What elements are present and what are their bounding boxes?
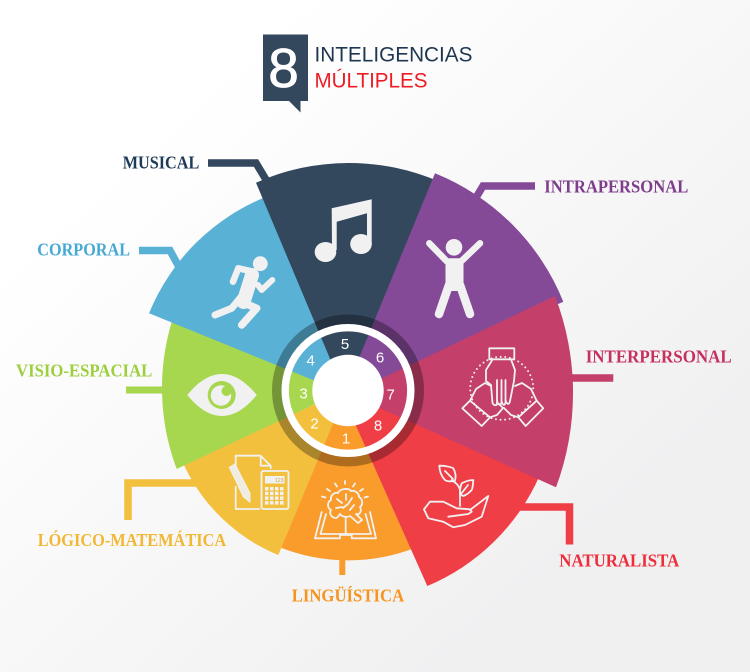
wedge bbox=[162, 321, 350, 469]
ring numbers: 7 bbox=[387, 386, 395, 404]
wedge bbox=[256, 163, 440, 392]
panel: interpersonal bbox=[345, 296, 732, 487]
wedge bbox=[341, 385, 539, 586]
title badge with number 8: 8 bbox=[268, 37, 299, 99]
panel: lingüística bbox=[279, 390, 412, 606]
connector bbox=[515, 507, 570, 544]
label: CORPORAL bbox=[37, 240, 130, 260]
panel: visio-espacial bbox=[16, 321, 350, 469]
connector bbox=[339, 555, 345, 575]
ring numbers: 8 bbox=[374, 418, 382, 434]
panel: corporal bbox=[37, 196, 355, 393]
wedge bbox=[149, 196, 355, 393]
ring numbers: 2 bbox=[310, 416, 319, 432]
panel: naturalista bbox=[341, 385, 680, 586]
icon: person jumping bbox=[429, 239, 480, 314]
connector bbox=[139, 250, 179, 267]
icon: document, pencil and calculator bbox=[229, 456, 288, 509]
icon: eye bbox=[187, 374, 257, 416]
label: INTERPERSONAL bbox=[586, 346, 732, 366]
white center disc bbox=[312, 355, 384, 426]
ring numbers: 1 bbox=[342, 430, 350, 448]
icon: brain over book bbox=[315, 481, 376, 538]
wedge bbox=[279, 390, 412, 560]
panel: musical bbox=[123, 152, 440, 392]
title bbox=[263, 34, 472, 112]
wedge bbox=[345, 296, 573, 487]
center ring bbox=[277, 320, 419, 462]
label: VISIO-ESPACIAL bbox=[16, 361, 152, 381]
white ring bbox=[285, 328, 411, 453]
connector bbox=[126, 386, 175, 394]
title line 2: MÚLTIPLES bbox=[314, 68, 428, 92]
ring numbers: 6 bbox=[376, 350, 384, 366]
icon: document, pencil and calculator: 123 bbox=[275, 478, 284, 484]
label: LINGÜÍSTICA bbox=[292, 586, 405, 606]
connector bbox=[208, 163, 268, 183]
icon: plant in hand bbox=[424, 466, 488, 527]
connector bbox=[474, 186, 535, 201]
label: NATURALISTA bbox=[559, 551, 680, 571]
icon: three joined hands bbox=[462, 348, 543, 426]
ring numbers bbox=[299, 336, 395, 448]
label: INTRAPERSONAL bbox=[544, 176, 688, 196]
dark outer ring bbox=[277, 320, 419, 462]
label: MUSICAL bbox=[123, 152, 199, 172]
panel: lógico-matemática bbox=[38, 390, 347, 555]
label: LÓGICO-MATEMÁTICA bbox=[38, 530, 227, 550]
title line 1: INTELIGENCIAS bbox=[314, 42, 472, 66]
title badge with number 8 bbox=[263, 34, 308, 112]
connector bbox=[565, 374, 613, 382]
wedge bbox=[183, 390, 347, 555]
panel: intrapersonal bbox=[345, 173, 688, 396]
ring numbers: 3 bbox=[299, 386, 308, 402]
icon: music notes bbox=[315, 199, 372, 262]
ring numbers: 5 bbox=[341, 336, 349, 353]
ring numbers: 4 bbox=[307, 352, 315, 370]
connector bbox=[128, 483, 205, 520]
icon: runner bbox=[215, 256, 272, 325]
wedge bbox=[345, 173, 563, 396]
